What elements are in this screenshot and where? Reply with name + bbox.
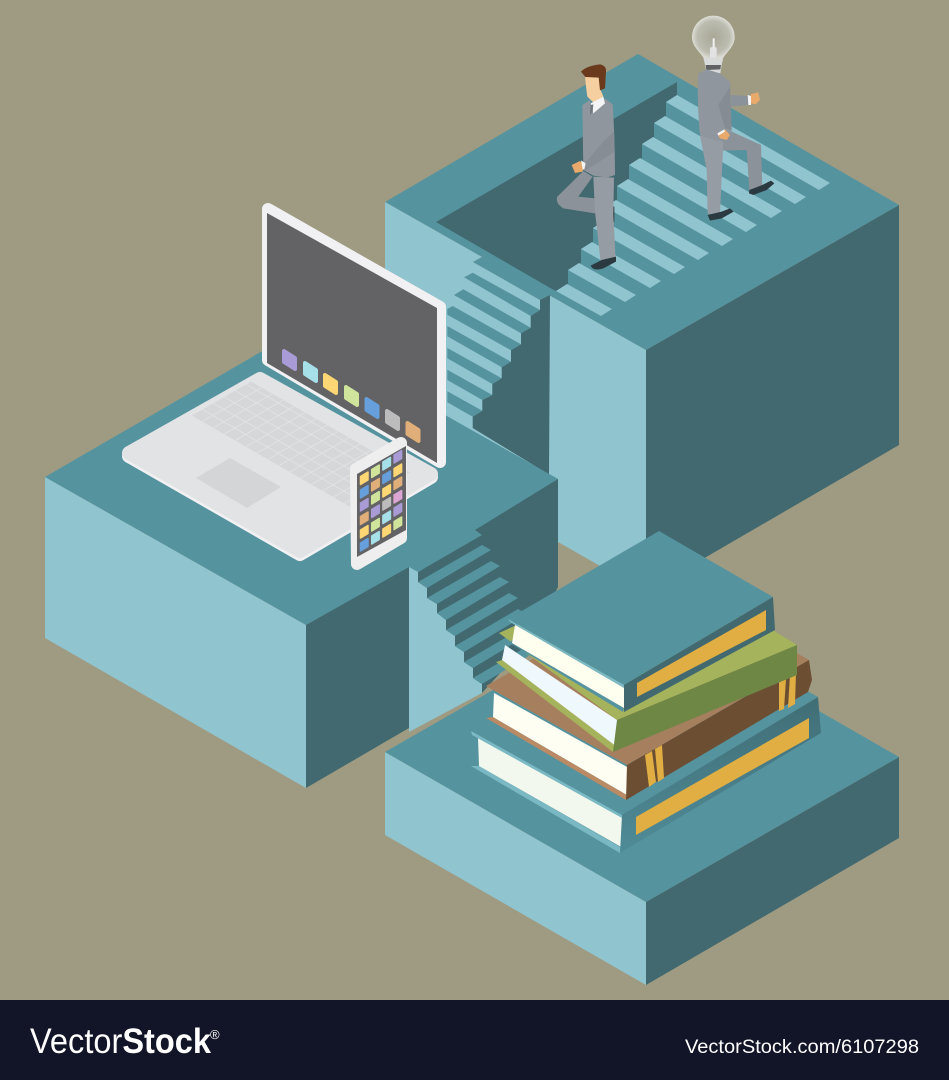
neck and face	[585, 75, 603, 102]
book: top teal	[508, 531, 775, 712]
raised leg	[718, 132, 762, 190]
smartphone	[356, 443, 406, 564]
stack of books	[471, 531, 821, 853]
shoes	[708, 208, 734, 221]
hand	[718, 129, 730, 140]
upper right block with staircase	[385, 54, 899, 592]
lower stair wall	[409, 560, 500, 732]
lightbulb-headed figure	[692, 16, 774, 221]
bent leg	[557, 171, 595, 213]
image id: VectorStock.com/6107298	[685, 1036, 919, 1058]
desktop icons	[284, 351, 418, 441]
phone app icons	[360, 450, 402, 551]
arm forward	[731, 95, 748, 107]
bulb head	[692, 16, 734, 74]
jacket	[698, 69, 732, 142]
hand	[572, 161, 584, 173]
upper stair treads	[556, 95, 830, 316]
stairwell opening	[436, 82, 677, 291]
hair	[581, 64, 606, 90]
book: bottom teal	[471, 613, 821, 853]
registered mark: ®	[210, 1027, 220, 1042]
shirt and tie	[591, 97, 605, 113]
standing leg	[593, 177, 616, 262]
brown book gold bands	[645, 672, 796, 787]
left block	[45, 331, 558, 788]
back shoe	[612, 207, 614, 223]
jacket	[582, 98, 615, 178]
trackpad	[196, 458, 281, 508]
lower stair treads	[418, 545, 545, 684]
keyboard	[191, 382, 410, 507]
businessman figure	[557, 64, 616, 270]
laptop base	[129, 379, 431, 554]
standing leg	[700, 135, 723, 214]
watermark bar	[0, 1000, 949, 1080]
left wall with second flight of stairs	[385, 202, 553, 477]
logo text: VectorStock	[30, 1022, 211, 1061]
front shoe	[591, 257, 616, 270]
book: green	[496, 560, 797, 752]
laptop	[129, 209, 440, 554]
laptop screen	[267, 209, 440, 463]
book: brown	[486, 581, 812, 800]
lower platform	[385, 607, 899, 985]
